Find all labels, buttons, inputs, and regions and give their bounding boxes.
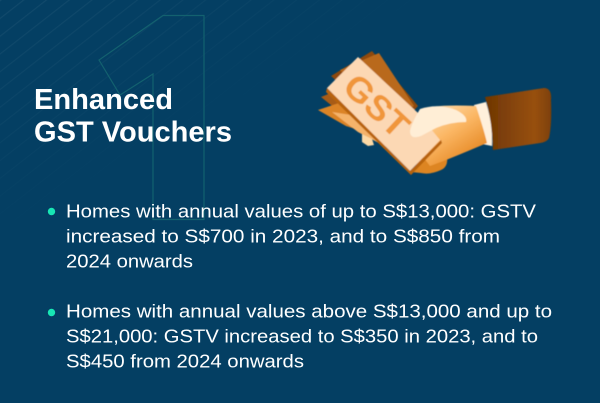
GST label: GST [336,66,417,146]
bullet item 2: S$21,000: GSTV increased to S$350 in 2023, and to [66,327,538,347]
bullet item 2 [48,302,552,372]
sleeve cuff [485,88,551,150]
bullet item 1: increased to S$700 in 2023, and to S$850 from [66,227,500,247]
title: Enhanced [34,84,173,116]
hand palm [414,106,487,166]
bullet item 1: 2024 onwards [66,252,193,272]
bullet item 2: S$450 from 2024 onwards [66,352,304,372]
bullet item 1 [48,202,536,272]
lower fingers [411,152,447,174]
bullet item 2: Homes with annual values above S$13,000 and up to [66,302,552,322]
banknote front [327,57,440,171]
title: GST Vouchers [34,116,232,148]
title [34,84,232,148]
index finger [410,106,466,137]
outlined numeral 1 [99,16,204,220]
bullet list [48,202,552,372]
icon: hand holding GST vouchers [318,51,551,175]
shirt cuff [474,102,492,146]
thumb behind note [362,134,374,146]
back banknotes [318,51,418,150]
bullet item 1: Homes with annual values of up to S$13,000: GSTV [66,202,536,222]
